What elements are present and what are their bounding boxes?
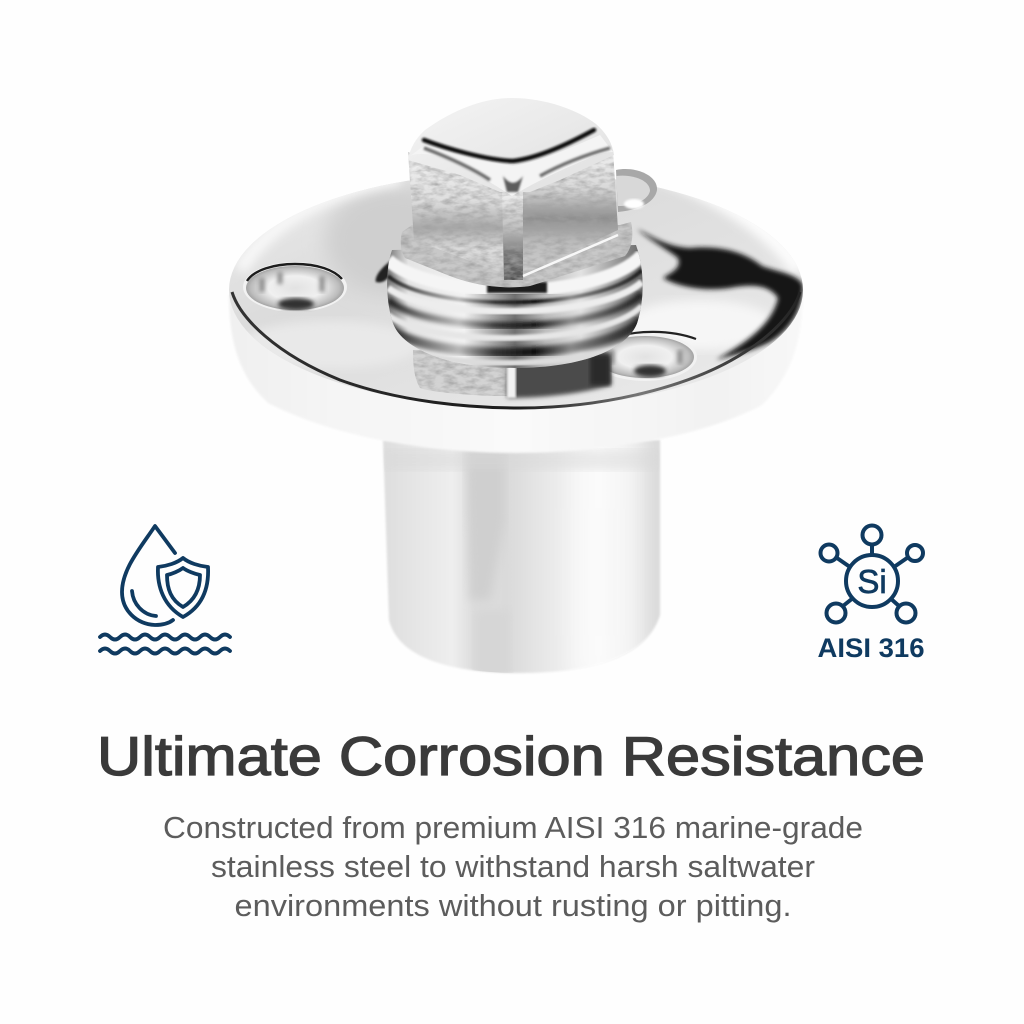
drop outline — [122, 526, 175, 625]
description text — [163, 810, 863, 923]
icon label: AISI 316 — [818, 633, 924, 663]
description text: environments without rusting or pitting. — [234, 888, 792, 923]
collar crease line — [523, 235, 618, 276]
square head: top cap and bevel — [408, 98, 614, 196]
element symbol: Si — [857, 563, 887, 600]
shield inner — [167, 568, 200, 607]
threaded collar — [387, 245, 643, 373]
small flange reflection by collar — [376, 260, 392, 282]
square head: centre edge — [502, 190, 523, 280]
cylinder body — [383, 440, 660, 680]
description text: Constructed from premium AISI 316 marine-grade — [163, 810, 863, 845]
dark flange reflection — [637, 229, 803, 360]
drop inner highlight — [132, 591, 156, 616]
square head: right face — [523, 150, 618, 274]
square head: left face — [408, 152, 505, 274]
waves — [100, 634, 230, 640]
shield outer — [158, 558, 208, 617]
icon: water drop with shield and waves — [100, 526, 230, 654]
mounting hole: left — [243, 262, 347, 312]
flange top face — [229, 172, 803, 408]
mounting hole: right — [593, 332, 697, 381]
hex collar under head — [401, 222, 632, 287]
product photo: stainless steel drain plug — [229, 98, 803, 680]
icon: silicon molecule — [820, 526, 923, 622]
description text: stainless steel to withstand harsh saltwater — [211, 849, 815, 884]
plug reflection on flange — [413, 350, 612, 398]
flange rim — [229, 290, 803, 453]
flange edge line — [232, 292, 800, 408]
mounting hole: rear — [616, 169, 657, 212]
title: Ultimate Corrosion Resistance — [97, 725, 925, 787]
